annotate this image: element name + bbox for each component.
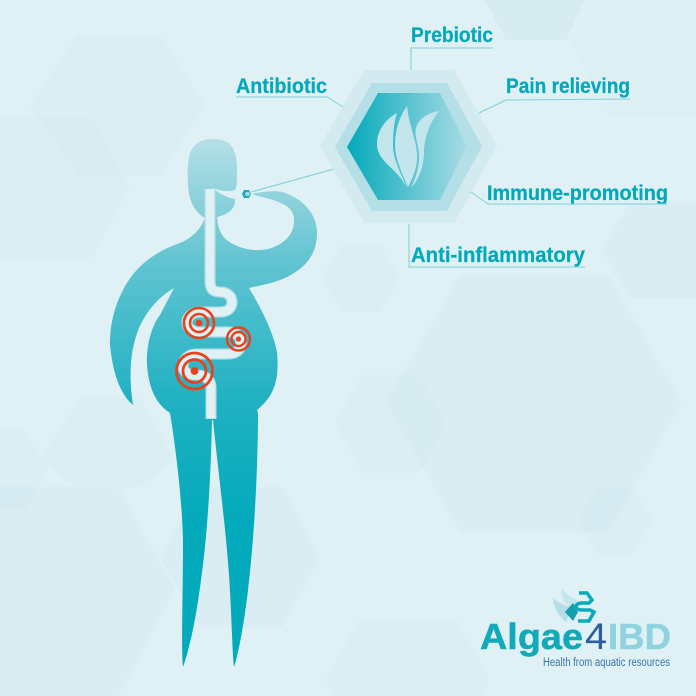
inflammation target 3 [176, 353, 212, 389]
logo wordmark: Algae [480, 616, 583, 657]
label: Pain relieving: Pain relieving [506, 75, 630, 98]
logo: Algae4IBD [480, 589, 671, 669]
logo icon [553, 589, 594, 622]
connector: capsule to hexagon [251, 169, 334, 192]
logo tagline: Health from aquatic resources [543, 657, 670, 669]
label: Antibiotic [236, 75, 343, 107]
figure silhouette [110, 139, 317, 667]
algae capsule held to mouth [242, 190, 251, 198]
inflammation target 2 [227, 328, 250, 350]
human figure [110, 139, 317, 667]
label: Prebiotic [411, 24, 493, 70]
label: Immune-promoting: Immune-promoting [487, 182, 668, 205]
central algae hexagon [320, 70, 497, 223]
inflammation target 1 [184, 308, 214, 338]
label: Anti-inflammatory: Anti-inflammatory [411, 244, 585, 267]
label: Prebiotic: Prebiotic [411, 24, 493, 47]
logo: Algae4IBD: IBD [608, 616, 671, 657]
icon: algae leaves [377, 106, 439, 188]
digestive tract [183, 189, 241, 419]
label: Antibiotic: Antibiotic [236, 75, 327, 98]
logo: Algae4IBD: 4 [585, 616, 607, 657]
label: Pain relieving [479, 75, 630, 113]
label: Anti-inflammatory [409, 224, 585, 267]
